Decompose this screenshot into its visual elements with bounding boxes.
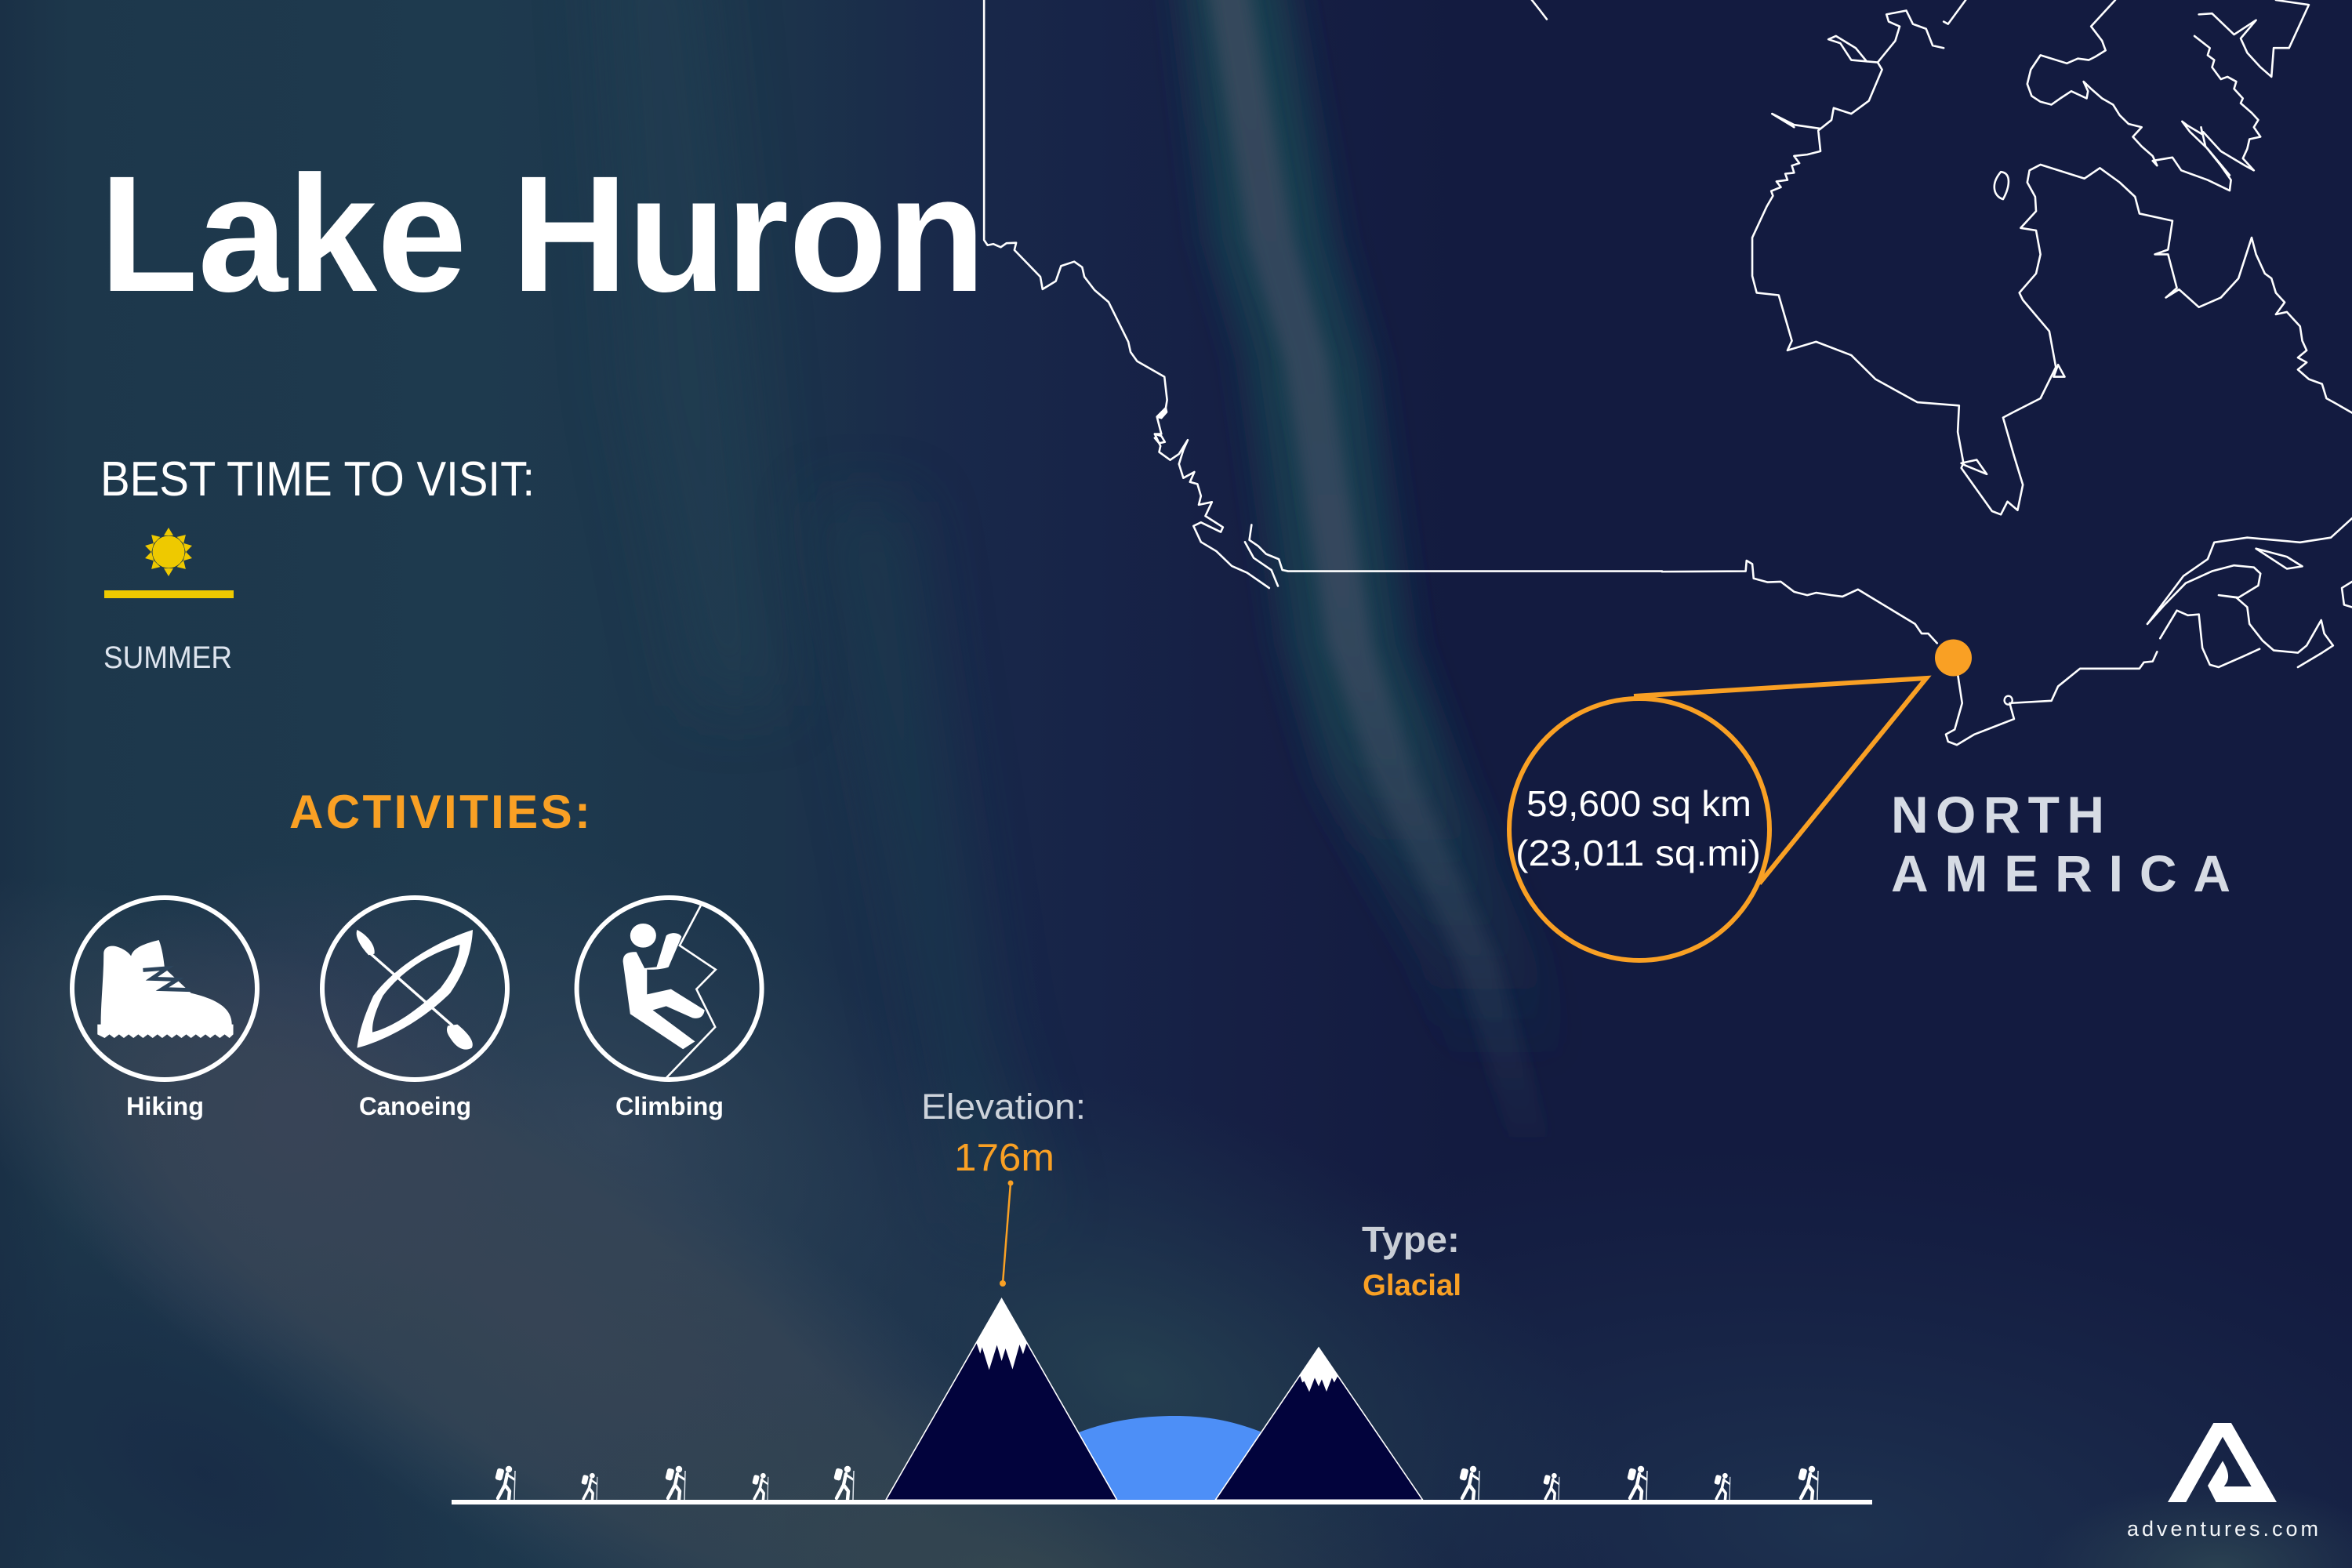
title: Lake Huron [100, 141, 985, 326]
value: glacial: Glacial [1363, 1269, 1461, 1302]
hikers: left group [495, 1466, 854, 1500]
illustration: lake and mountains [886, 1299, 1423, 1500]
logo: adventures.com [2127, 1423, 2318, 1541]
arrow: elevation pointer [1000, 1181, 1013, 1287]
map: west coast [984, 0, 1662, 588]
label: elevation: Elevation: [921, 1087, 1086, 1127]
mountain: small peak [1215, 1348, 1423, 1500]
mountain: tall peak [886, 1299, 1117, 1500]
icon: canoe and paddle [322, 898, 507, 1080]
icon: sun [144, 528, 193, 576]
icon: climber on rock [577, 898, 762, 1080]
label: type: Type: [1362, 1219, 1460, 1260]
heading: activities: ACTIVITIES: [289, 786, 590, 838]
logo wordmark: adventures.com [2127, 1517, 2318, 1541]
area in square miles: (23,011 sq.mi) [1515, 833, 1761, 873]
label: summer: SUMMER [103, 641, 232, 675]
callout: lake area [1509, 678, 1926, 960]
map: North America coastline [984, 0, 2352, 745]
label: canoeing: Canoeing [359, 1092, 471, 1120]
label: North America: AMERICA [1891, 844, 2230, 902]
bar: summer marker [104, 590, 234, 598]
area in square kilometres: 59,600 sq km [1526, 783, 1751, 824]
icon: hiking boot [72, 898, 257, 1080]
label: North America [1891, 786, 2230, 902]
heading: best time to visit: BEST TIME TO VISIT: [100, 452, 535, 506]
ground line [452, 1500, 1872, 1504]
marker: Lake Huron location [1935, 640, 1972, 676]
hikers: right group [1459, 1466, 1818, 1500]
lake [1073, 1416, 1268, 1500]
label: climbing: Climbing [615, 1092, 724, 1120]
map: Hudson Bay and eastern Canada [1662, 0, 2352, 745]
label: hiking: Hiking [126, 1092, 204, 1120]
value: elevation 176m: 176m [954, 1137, 1054, 1179]
label: North America: NORTH [1891, 786, 2104, 844]
